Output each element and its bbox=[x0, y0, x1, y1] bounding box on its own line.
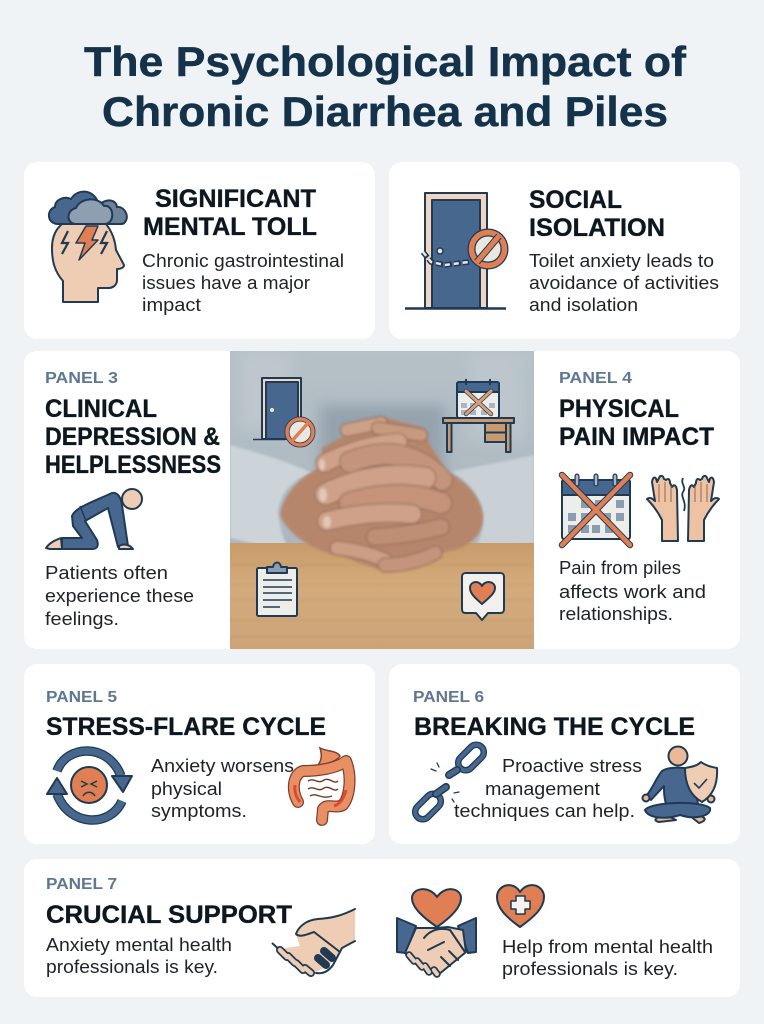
heading: MENTAL TOLL bbox=[143, 213, 317, 241]
heading: ISOLATION bbox=[529, 214, 665, 242]
panel 7: crucial support bbox=[24, 859, 740, 997]
heading bbox=[529, 186, 665, 242]
body text: techniques can help. bbox=[454, 800, 635, 821]
clasped hands bbox=[280, 416, 483, 572]
overlay icon: clipboard bbox=[257, 562, 297, 616]
panel label: PANEL 4 bbox=[559, 370, 632, 387]
icon: broken chain bbox=[412, 742, 487, 822]
panel label: PANEL 3 bbox=[45, 370, 118, 387]
body text: Patients often bbox=[45, 562, 168, 583]
panel 5: stress-flare cycle bbox=[24, 664, 375, 844]
icon: stress cycle arrows and face bbox=[47, 751, 132, 820]
body text: Anxiety mental health bbox=[46, 934, 232, 955]
title: The Psychological Impact of bbox=[84, 38, 687, 85]
heading: SOCIAL bbox=[529, 186, 622, 214]
body text bbox=[46, 934, 232, 977]
body text: feelings. bbox=[45, 608, 119, 629]
heading: CRUCIAL SUPPORT bbox=[46, 901, 292, 929]
body text bbox=[529, 250, 719, 315]
icon: heart with plus bbox=[497, 885, 544, 927]
heading: PAIN IMPACT bbox=[559, 423, 714, 451]
body text bbox=[45, 562, 194, 629]
heading: HELPLESSNESS bbox=[45, 451, 221, 479]
heading bbox=[559, 395, 714, 451]
body text: management bbox=[485, 778, 600, 799]
body text: professionals is key. bbox=[502, 958, 678, 979]
body text: and isolation bbox=[529, 294, 638, 315]
body text bbox=[151, 755, 294, 821]
body text: physical bbox=[151, 778, 222, 799]
heading: SIGNIFICANT bbox=[155, 185, 316, 213]
body text bbox=[454, 755, 642, 821]
overlay icon: calendar on desk bbox=[443, 379, 514, 452]
body text: professionals is key. bbox=[46, 956, 218, 977]
panel 3: clinical depression bbox=[24, 351, 244, 649]
body text: impact bbox=[142, 294, 201, 315]
panel label: PANEL 6 bbox=[413, 689, 484, 706]
body text: Toilet anxiety leads to bbox=[529, 250, 714, 271]
icon: inflamed intestines bbox=[294, 748, 350, 820]
title: Chronic Diarrhea and Piles bbox=[102, 88, 668, 135]
body text bbox=[559, 557, 706, 624]
sleeves bbox=[230, 445, 534, 553]
heading: CLINICAL bbox=[45, 395, 157, 423]
photo: clasped hands on table bbox=[230, 351, 534, 649]
heading: DEPRESSION & bbox=[45, 423, 220, 451]
icon: chained door with no sign bbox=[405, 193, 506, 308]
body text: Pain from piles bbox=[559, 557, 681, 578]
icon: meditating person with shield bbox=[642, 746, 717, 823]
heading: STRESS-FLARE CYCLE bbox=[46, 713, 326, 741]
panel: significant mental toll bbox=[24, 162, 375, 339]
heading bbox=[143, 185, 317, 241]
body text bbox=[502, 936, 713, 979]
icon: handshake bbox=[272, 909, 355, 974]
panel 6: breaking the cycle bbox=[389, 664, 740, 844]
icon: head with storm cloud bbox=[49, 192, 127, 302]
icon: crawling person bbox=[46, 489, 142, 549]
panel 4: physical pain impact bbox=[520, 351, 740, 649]
heading bbox=[45, 395, 221, 479]
body text: affects work and bbox=[559, 581, 706, 602]
icon: aching hands bbox=[647, 476, 719, 541]
body text: Help from mental health bbox=[502, 936, 713, 957]
overlay icon: door bbox=[253, 378, 313, 445]
body text: Anxiety worsens bbox=[151, 755, 294, 776]
body text: Proactive stress bbox=[502, 755, 642, 776]
icon: heart with handshake bbox=[397, 889, 476, 975]
title bbox=[84, 38, 687, 135]
body text: relationships. bbox=[559, 603, 673, 624]
icon: crossed-out calendar bbox=[562, 475, 630, 545]
body text: issues have a major bbox=[142, 272, 310, 293]
panel: social isolation bbox=[389, 162, 740, 339]
panel label: PANEL 5 bbox=[46, 689, 117, 706]
body text: Chronic gastrointestinal bbox=[142, 250, 344, 271]
overlay icon: heart speech bubble bbox=[462, 573, 504, 620]
heading: PHYSICAL bbox=[559, 395, 679, 423]
body text: avoidance of activities bbox=[529, 272, 719, 293]
body text: experience these bbox=[45, 585, 194, 606]
heading: BREAKING THE CYCLE bbox=[414, 713, 695, 741]
body text: symptoms. bbox=[151, 800, 247, 821]
body text bbox=[142, 250, 344, 315]
panel label: PANEL 7 bbox=[46, 876, 117, 893]
